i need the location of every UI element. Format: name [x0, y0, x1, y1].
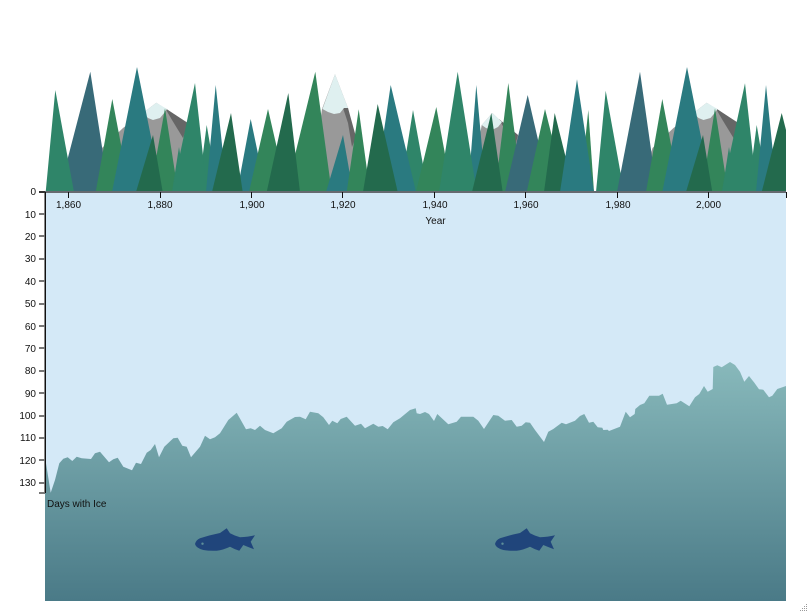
- x axis title: Year: [425, 216, 446, 227]
- x axis: year: [45, 191, 787, 227]
- plot background: sky-blue ice region: [45, 192, 786, 601]
- icon: fish 2: [495, 528, 555, 551]
- area chart: days with ice: [45, 362, 786, 601]
- x axis: year: 1,860: [56, 200, 81, 211]
- y axis: days with ice: 20: [25, 232, 36, 243]
- mountain 4: [640, 103, 755, 192]
- y axis: days with ice: 50: [25, 299, 36, 310]
- y axis: days with ice: 70: [25, 344, 36, 355]
- y axis: days with ice: 40: [25, 277, 36, 288]
- y axis: days with ice: 90: [25, 389, 36, 400]
- x axis: year: 1,980: [605, 200, 631, 211]
- y axis: days with ice: 80: [25, 366, 36, 377]
- y axis: days with ice: 120: [19, 456, 36, 467]
- y axis: days with ice: 10: [25, 210, 36, 221]
- y axis: days with ice: 30: [25, 254, 36, 265]
- y axis: days with ice: [19, 187, 107, 510]
- mountain 3: [470, 113, 530, 192]
- mountain 2: [310, 74, 362, 192]
- y axis: days with ice: 100: [19, 411, 36, 422]
- mountain 1: [90, 103, 205, 192]
- y axis: days with ice: 60: [25, 322, 36, 333]
- x axis: year: 1,940: [422, 200, 448, 211]
- x axis: year: 2,000: [696, 200, 721, 211]
- y axis: days with ice: 110: [20, 433, 36, 444]
- y axis title: Days with Ice: [47, 499, 107, 510]
- y axis: days with ice: 130: [19, 478, 36, 489]
- x axis: year: 1,920: [330, 200, 356, 211]
- forest of trees: [46, 67, 786, 192]
- x axis: year: 1,900: [239, 200, 265, 211]
- icon: fish 1: [195, 528, 255, 551]
- x axis: year: 1,880: [147, 200, 173, 211]
- x axis: year: 1,960: [513, 200, 539, 211]
- y axis: days with ice: 0: [30, 187, 36, 198]
- resize grip: [800, 604, 807, 611]
